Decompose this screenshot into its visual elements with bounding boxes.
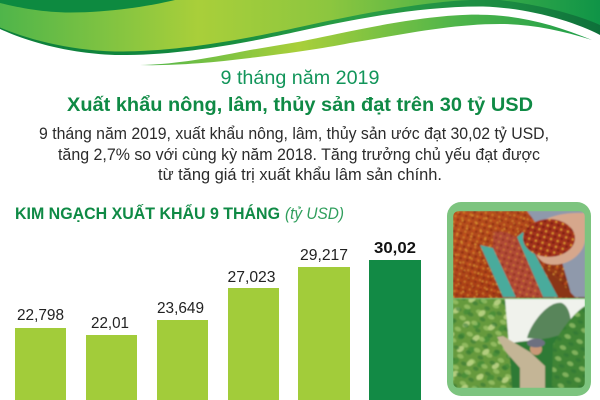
bar values: 27,023 (228, 269, 276, 286)
subtitle: 9 tháng năm 2019 (220, 68, 380, 89)
bar values: 22,798 (17, 307, 64, 324)
chart heading: (tỷ USD) (285, 205, 344, 223)
intro text (39, 125, 549, 184)
intro text: từ tăng giá trị xuất khẩu lâm sản chính. (158, 166, 442, 184)
intro text: tăng 2,7% so với cùng kỳ năm 2018. Tăng trưởng chủ yếu đạt được (58, 146, 540, 164)
wave: dark top-left leaf (0, 0, 175, 12)
wave: dark edge of main band (0, 0, 600, 55)
photo frame (447, 202, 591, 396)
bar values: 30,02 (374, 240, 416, 257)
bars (15, 260, 421, 400)
intro text: 9 tháng năm 2019, xuất khẩu nông, lâm, thủy sản ước đạt 30,02 tỷ USD, (39, 125, 549, 143)
wave: main green band (0, 0, 600, 52)
bar values: 23,649 (157, 300, 204, 317)
photo: coffee beans (453, 211, 585, 298)
bar values: 22,01 (91, 315, 129, 332)
bar values: 29,217 (300, 247, 348, 264)
title: Xuất khẩu nông, lâm, thủy sản đạt trên 30 tỷ USD (67, 95, 533, 116)
header wave (0, 0, 600, 65)
photo panel (447, 202, 591, 396)
bar chart (15, 240, 421, 400)
wave: lower swoosh (140, 15, 592, 65)
photo: pepper farmer (453, 299, 585, 388)
bar values (17, 240, 416, 332)
chart heading: KIM NGẠCH XUẤT KHẨU 9 THÁNG (15, 204, 280, 223)
